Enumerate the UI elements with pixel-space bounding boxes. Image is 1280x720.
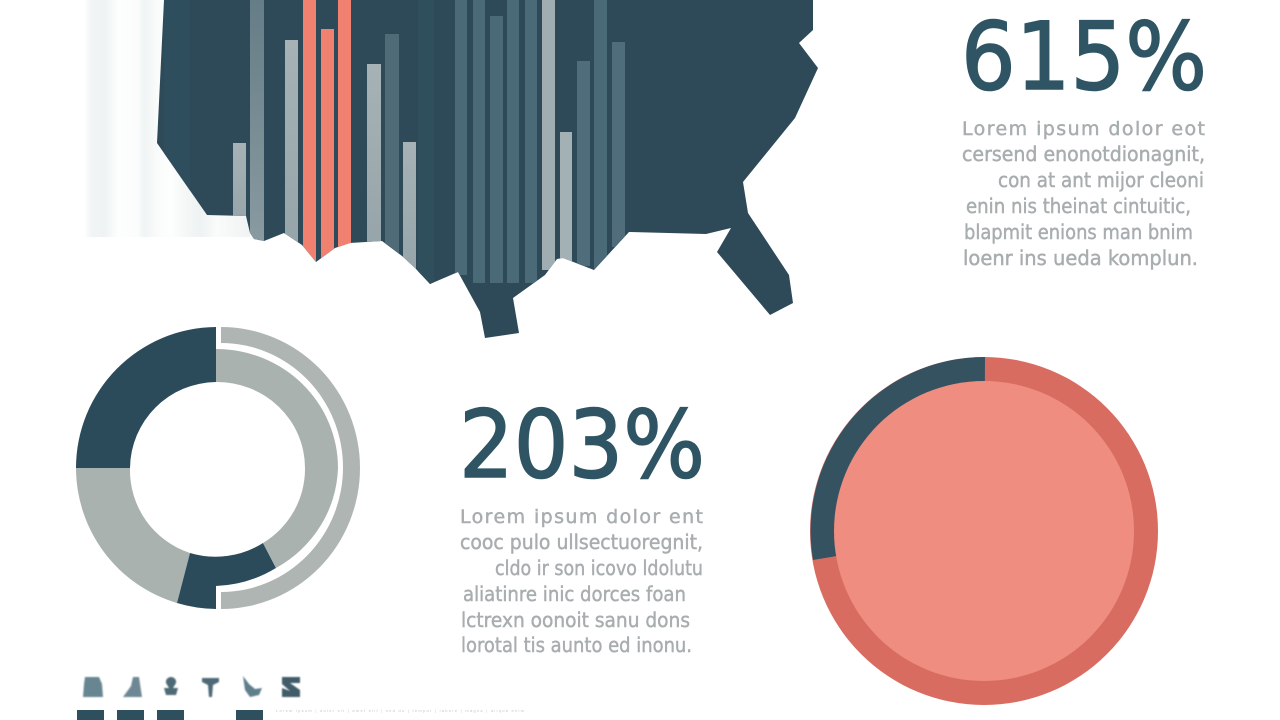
- fine print: Lorem ipsum | dolor sit | amet elit | sed do | tempor | labore | magna | aliqua enim: [276, 708, 525, 713]
- pie slate wedge: [811, 357, 985, 560]
- pie inner disc: [834, 381, 1134, 681]
- text block: upper right: enin nis theinat cintuitic,: [966, 194, 1191, 218]
- text block: upper right: loenr ins ueda komplun.: [963, 246, 1198, 270]
- icon row: [83, 676, 300, 697]
- text block: center: lorotal tis aunto ed inonu.: [461, 633, 692, 657]
- icon: head: [164, 677, 178, 695]
- segment: dark bottom: [177, 543, 276, 609]
- icon: tee: [202, 678, 219, 697]
- segment: dark top left: [76, 327, 216, 468]
- map with bars: [157, 0, 818, 338]
- text block: center: cldo ir son icovo ldolutu: [495, 556, 703, 580]
- map silhouette: [157, 0, 818, 338]
- bottom blocks: [77, 710, 263, 720]
- stat: 615%: 615%: [961, 3, 1207, 112]
- text block: center: [460, 506, 703, 657]
- text block: center: lctrexn oonoit sanu dons: [461, 608, 690, 632]
- segment: grey left: [76, 468, 190, 603]
- pale striped backdrop: [85, 0, 250, 237]
- text block: upper right: blapmit enions man bnim: [964, 220, 1193, 244]
- outer arc: [221, 327, 360, 609]
- icon: stack: [83, 677, 103, 697]
- text block: upper right: con at ant mijor cleoni: [998, 168, 1204, 192]
- icon: figure: [123, 677, 142, 697]
- text block: center: aliatinre inic dorces foan: [463, 582, 686, 606]
- segment: grey right: [216, 349, 338, 568]
- stat: 203%: 203%: [459, 391, 705, 500]
- bars clipped to map: [164, 0, 625, 290]
- text block: upper right: [962, 118, 1205, 270]
- icon: box: [282, 677, 300, 697]
- text block: center: Lorem ipsum dolor ent: [460, 506, 703, 528]
- text block: upper right: Lorem ipsum dolor eot: [962, 118, 1205, 140]
- icon: bird: [243, 676, 262, 697]
- text block: upper right: cersend enonotdionagnit,: [962, 142, 1205, 166]
- text block: center: cooc pulo ullsectuoregnit,: [460, 530, 703, 554]
- pie chart: [810, 357, 1158, 705]
- pie base ring: [810, 357, 1158, 705]
- donut chart: [76, 327, 360, 609]
